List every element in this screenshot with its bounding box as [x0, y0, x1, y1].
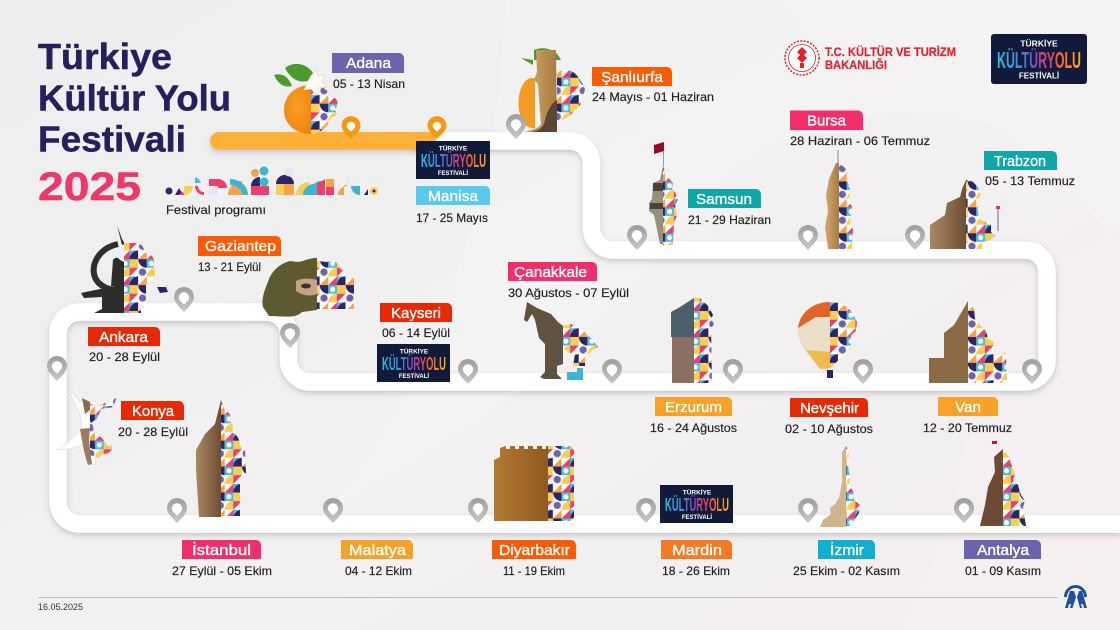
pin: Adana — [342, 116, 360, 139]
pin: Çanakkale — [602, 359, 622, 384]
illustration: Samsun tower — [649, 142, 678, 245]
city label: Van — [923, 397, 1012, 435]
ministry logo: T.C. KÜLTÜR VE TURİZM — [825, 44, 956, 59]
city label: Konya — [118, 401, 188, 439]
pin: Trabzon — [905, 225, 925, 250]
city label: İzmir — [793, 540, 900, 578]
city label: Adana — [332, 53, 405, 91]
city label: Bursa: Bursa — [807, 114, 847, 130]
city label: Gaziantep: 13 - 21 Eylül — [198, 260, 261, 274]
city label: Mardin — [661, 540, 732, 578]
pin: Diyarbakır — [468, 498, 488, 523]
city label: Şanlıurfa: 24 Mayıs - 01 Haziran — [592, 90, 714, 104]
title: Festivali — [38, 118, 186, 160]
city label: Malatya: Malatya — [349, 543, 407, 559]
city label: Van: Van — [955, 400, 981, 416]
festival logo: Mardin: KÜLTÜRYOLU — [665, 495, 729, 515]
city label: Nevşehir: 02 - 10 Ağustos — [785, 422, 873, 436]
city label: Kayseri — [380, 303, 452, 340]
city label: Trabzon: Trabzon — [994, 154, 1046, 170]
city label: İzmir: İzmir — [830, 541, 864, 559]
festival logo: Manisa: TÜRKİYE — [439, 144, 468, 152]
illustration: Çanakkale Trojan horse — [524, 302, 598, 380]
festival logo: Manisa: FESTİVALİ — [438, 170, 468, 177]
illustration: İzmir clock tower — [820, 446, 860, 527]
route road: white path — [58, 141, 1120, 524]
city label: Gaziantep: Gaziantep — [205, 239, 276, 255]
festival logo: Kayseri: TÜRKİYE — [400, 346, 429, 356]
illustration: Erzurum minaret — [671, 298, 714, 383]
pin: İzmir — [798, 498, 818, 523]
city label: Mardin: 18 - 26 Ekim — [662, 564, 730, 578]
city label: Çanakkale: Çanakkale — [514, 265, 587, 281]
festival logo: Mardin — [660, 485, 733, 523]
illustration: Konya dervish — [57, 388, 117, 465]
city label: İstanbul: İstanbul — [192, 541, 251, 559]
festival logo: Manisa — [416, 141, 490, 179]
ministry logo — [785, 41, 956, 75]
city label: Antalya — [964, 540, 1041, 578]
illustration: Trabzon building — [930, 180, 1000, 249]
pin: Ankara — [174, 287, 194, 312]
city label: Manisa: 17 - 25 Mayıs — [416, 211, 488, 225]
festival logo: Kayseri — [377, 344, 450, 382]
festival logo: Mardin: TÜRKİYE — [683, 488, 712, 496]
city label: Şanlıurfa — [592, 67, 714, 104]
illustration: Van church — [929, 301, 1007, 383]
festival logo: Manisa: KÜLTÜRYOLU — [421, 151, 486, 171]
city label: Konya: 20 - 28 Eylül — [118, 425, 188, 439]
AA logo — [1064, 585, 1087, 608]
pin: Samsun — [627, 225, 647, 250]
pin: Nevşehir — [853, 359, 873, 384]
city label: Çanakkale: 30 Ağustos - 07 Eylül — [508, 286, 629, 300]
pin: Antalya — [954, 498, 974, 523]
pin: Gaziantep — [280, 323, 300, 348]
city label: İstanbul: 27 Eylül - 05 Ekim — [172, 564, 272, 578]
pin: Kayseri — [458, 359, 478, 384]
title — [38, 36, 231, 209]
footer line — [38, 597, 1058, 598]
city label: Adana: Adana — [346, 56, 392, 72]
festival logo: Mardin: FESTİVALİ — [682, 514, 712, 521]
festival logo: top right: FESTİVALİ — [1019, 72, 1059, 80]
city label: İzmir: 25 Ekim - 02 Kasım — [793, 564, 900, 578]
city label: Nevşehir — [785, 398, 873, 436]
title: 2025 — [38, 165, 141, 209]
pin: Mardin — [636, 498, 656, 523]
illustration: Gaziantep mosaic — [262, 258, 354, 317]
city label: Bursa — [790, 110, 930, 148]
city label: Konya: Konya — [132, 404, 175, 420]
city label: Gaziantep — [198, 236, 281, 274]
city label: Samsun: 21 - 29 Haziran — [688, 213, 771, 227]
title: Türkiye — [38, 36, 172, 77]
city label: Nevşehir: Nevşehir — [800, 401, 859, 417]
city label: Şanlıurfa: Şanlıurfa — [601, 70, 664, 86]
pin: Malatya — [323, 498, 343, 523]
festival logo: top right — [991, 34, 1087, 84]
illustration: Şanlıurfa statue — [518, 48, 585, 132]
city label: Adana: 05 - 13 Nisan — [333, 77, 405, 91]
city label: Kayseri: Kayseri — [391, 306, 441, 322]
city label: Trabzon — [984, 151, 1075, 188]
city label: Malatya — [341, 540, 413, 578]
illustration: Nevşehir balloon — [798, 302, 857, 378]
city label: Manisa: Manisa — [428, 189, 479, 205]
city label: Kayseri: 06 - 14 Eylül — [382, 326, 450, 340]
city label: Van: 12 - 20 Temmuz — [923, 421, 1012, 435]
city label: Erzurum: Erzurum — [665, 400, 722, 416]
city label: Mardin: Mardin — [672, 543, 722, 559]
city label: Diyarbakır: 11 - 19 Ekim — [503, 564, 565, 578]
city label: Ankara — [88, 327, 160, 364]
pin: Van — [1022, 359, 1042, 384]
pin: Manisa — [428, 116, 446, 139]
title: Kültür Yolu — [38, 78, 231, 118]
city label: Diyarbakır: Diyarbakır — [499, 543, 570, 559]
festival logo: Kayseri: FESTİVALİ — [399, 373, 429, 380]
city label: Trabzon: 05 - 13 Temmuz — [985, 174, 1075, 188]
pin: İstanbul — [167, 498, 187, 523]
festival logo: Kayseri: KÜLTÜRYOLU — [382, 354, 446, 374]
footer date: 16.05.2025 — [38, 602, 83, 613]
pin: Şanlıurfa — [506, 114, 526, 139]
illustration: Antalya clock tower — [980, 441, 1026, 526]
city label: Malatya: 04 - 12 Ekim — [345, 564, 412, 578]
city label: Antalya: 01 - 09 Kasım — [965, 564, 1041, 578]
city label: Samsun — [688, 189, 771, 227]
city label: Erzurum: 16 - 24 Ağustos — [650, 421, 737, 435]
illustration: Ankara monument — [81, 225, 168, 313]
pin: Konya — [47, 356, 67, 381]
illustration: İstanbul Galata tower — [196, 400, 246, 517]
city label: Samsun: Samsun — [696, 192, 752, 208]
pin: Bursa — [798, 225, 818, 250]
city label: İstanbul — [172, 540, 272, 578]
city label: Antalya: Antalya — [977, 543, 1030, 559]
decorative mosaic strip — [166, 166, 378, 195]
ministry logo: BAKANLIĞI — [825, 57, 887, 72]
city label: Diyarbakır — [492, 540, 576, 578]
route road: orange start segment — [210, 132, 436, 150]
illustration: Adana orange — [274, 64, 337, 134]
city label: Ankara: Ankara — [99, 330, 149, 346]
illustration: Diyarbakır wall — [494, 446, 574, 521]
festival program caption: Festival programı — [166, 203, 266, 217]
city label: Ankara: 20 - 28 Eylül — [89, 350, 160, 364]
city label: Bursa: 28 Haziran - 06 Temmuz — [790, 134, 930, 148]
city label: Çanakkale — [508, 262, 629, 300]
pin: Erzurum — [723, 359, 743, 384]
festival logo: top right: TÜRKİYE — [1020, 38, 1058, 48]
illustration: Bursa tower — [825, 150, 853, 249]
city label: Erzurum — [650, 397, 737, 435]
city label: Manisa — [416, 186, 490, 225]
